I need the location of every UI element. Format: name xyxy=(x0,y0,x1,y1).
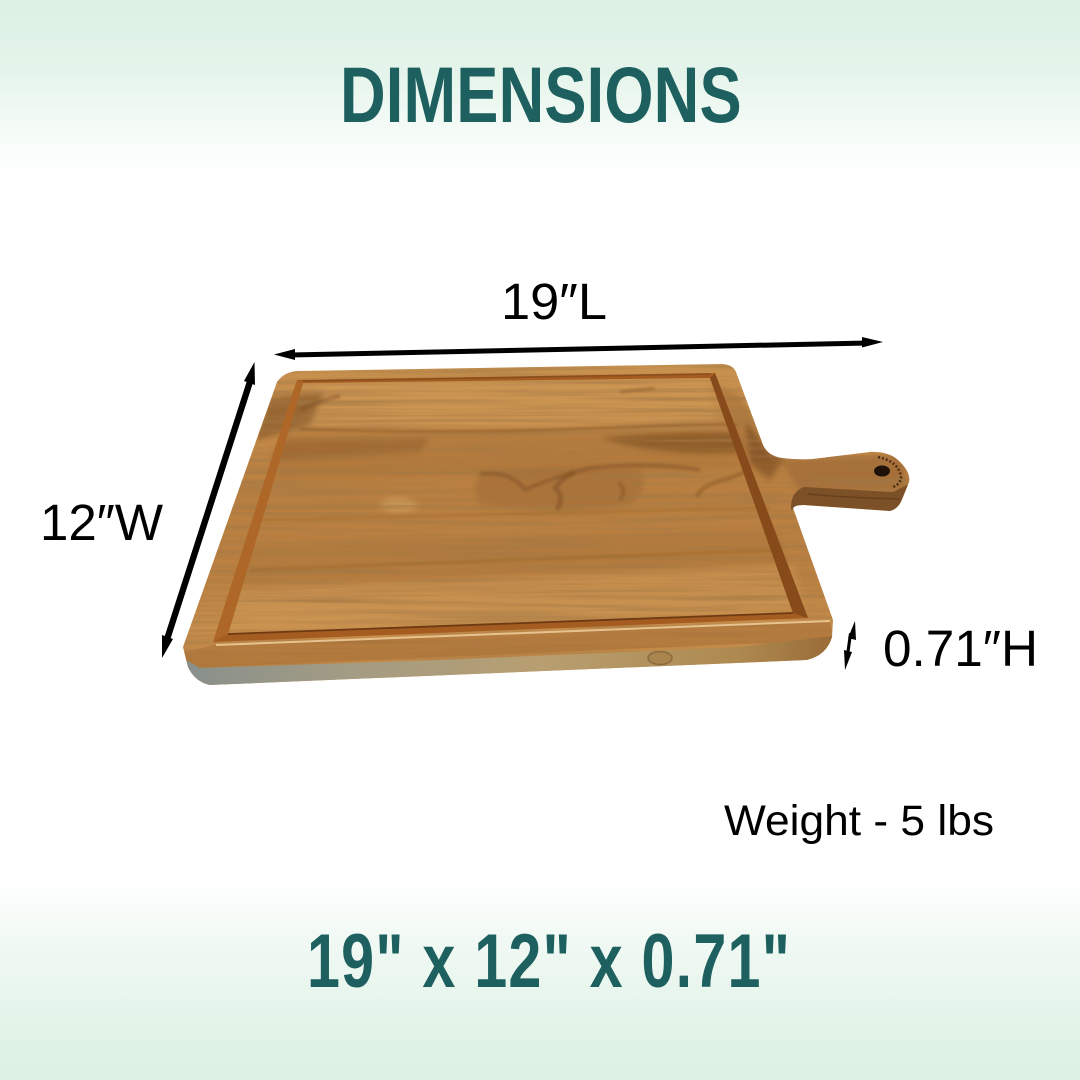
title: DIMENSIONS xyxy=(340,51,742,140)
groove right dark accent xyxy=(710,373,808,618)
label: width: 12″W xyxy=(40,494,163,551)
front edge of board xyxy=(186,636,832,685)
grain lines and swirls xyxy=(250,388,780,570)
wood tone patches xyxy=(237,387,907,606)
groove left accent xyxy=(213,380,303,642)
label: length: 19″L xyxy=(501,273,607,330)
handle engraving xyxy=(878,457,901,487)
juice groove xyxy=(213,373,808,642)
arrow: width xyxy=(162,362,255,658)
light line below groove xyxy=(216,621,830,645)
arrow: height xyxy=(844,621,856,670)
groove bottom dark line xyxy=(228,613,793,634)
arrow: length xyxy=(274,337,883,360)
rim shading xyxy=(184,620,833,668)
handle side streak xyxy=(808,494,900,499)
footer dimensions: 19" x 12" x 0.71" xyxy=(307,919,790,1004)
grain texture xyxy=(170,355,920,695)
label: height: 0.71″H xyxy=(883,620,1038,677)
knot on front edge xyxy=(648,652,672,664)
label: weight: Weight - 5 lbs xyxy=(724,797,994,845)
handle hole xyxy=(874,466,890,476)
cutting board image xyxy=(170,355,920,695)
groove top dark line xyxy=(303,374,710,381)
handle side xyxy=(791,484,909,511)
